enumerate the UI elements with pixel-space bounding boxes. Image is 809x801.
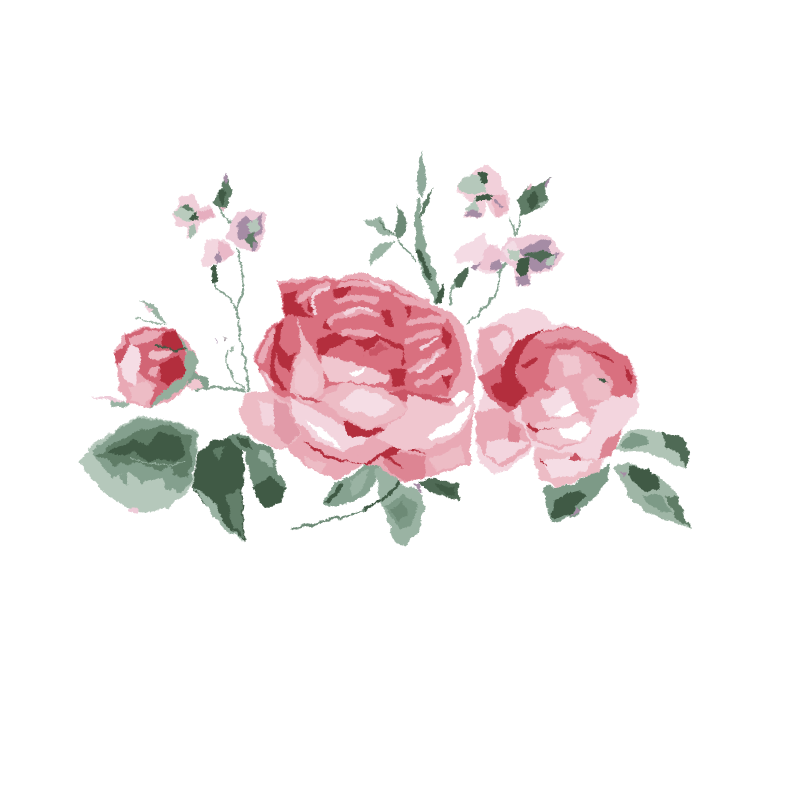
main rose: outer petal wash — [273, 400, 300, 445]
top spray: flower one — [457, 165, 510, 218]
top spray: small bud — [453, 268, 468, 288]
top spray: flower stems — [450, 216, 521, 325]
top spray: flower three — [453, 233, 502, 275]
main rose: knob shadow — [353, 335, 405, 367]
main rose: big front petal — [320, 383, 407, 430]
main rose: bottom band — [288, 430, 471, 482]
top spray: compound leaves — [362, 203, 418, 267]
main rose: crimson fold — [343, 420, 387, 438]
main rose: inner knob — [363, 340, 403, 372]
top spray: tall leaf — [416, 150, 427, 198]
main rose: left outer petal — [240, 392, 302, 447]
top spray: main stem — [415, 197, 441, 303]
dark centre leaf — [193, 438, 245, 541]
top spray: stem shadow — [417, 248, 433, 280]
right rose leaf: left — [543, 463, 610, 523]
top spray: small dark leaf — [436, 282, 445, 303]
main rose: deep shadows — [270, 287, 453, 391]
main rose — [240, 273, 475, 482]
main rose: central petal — [322, 355, 390, 385]
main rose: white glint — [350, 367, 365, 377]
left lower sepal — [90, 396, 130, 407]
top spray: flower two — [500, 235, 565, 287]
main rose: right white fleck — [450, 390, 470, 408]
right rose leaf: lower — [612, 463, 690, 528]
main rose: lower right white patch — [427, 403, 473, 442]
top spray: bud cluster — [517, 178, 553, 217]
left spray: stems — [205, 206, 250, 390]
right rose — [475, 308, 639, 488]
main rose: big petal highlight — [340, 388, 397, 417]
right rose leaf: upper — [615, 428, 690, 470]
left spray: bud cluster — [212, 173, 232, 211]
left spray: flower two — [225, 210, 265, 252]
main rose: ruffled pink streaks — [262, 284, 450, 385]
main rose: left pale petal — [290, 317, 324, 405]
left spray: tiny sprig buds — [215, 336, 234, 353]
top spray: side leaf — [420, 186, 434, 219]
main rose: pale streaks — [267, 282, 438, 387]
left spray: flower one — [173, 195, 215, 238]
main rose: knob highlight — [368, 343, 387, 355]
main rose: dome — [255, 279, 460, 400]
main rose: crimson underline — [303, 440, 427, 468]
curled leaf — [227, 432, 286, 507]
main rose: lower left petal — [290, 400, 372, 452]
main rose: lower left white patch — [305, 422, 342, 448]
rose bud — [115, 327, 207, 407]
main rose: lower right petal — [377, 393, 475, 452]
main rose: left petal tint — [295, 357, 318, 400]
main rose: lower red wash — [293, 390, 453, 407]
left big leaf — [80, 416, 198, 514]
main rose: silhouette — [240, 273, 475, 482]
left top sepal leaf — [135, 300, 167, 325]
main rose: bottom light patches — [303, 443, 463, 473]
main rose: bottom band tint — [383, 452, 427, 480]
left spray: flower three — [200, 238, 235, 283]
main rose: outer petal highlight — [258, 400, 275, 427]
bottom leaves and stem — [290, 465, 460, 548]
